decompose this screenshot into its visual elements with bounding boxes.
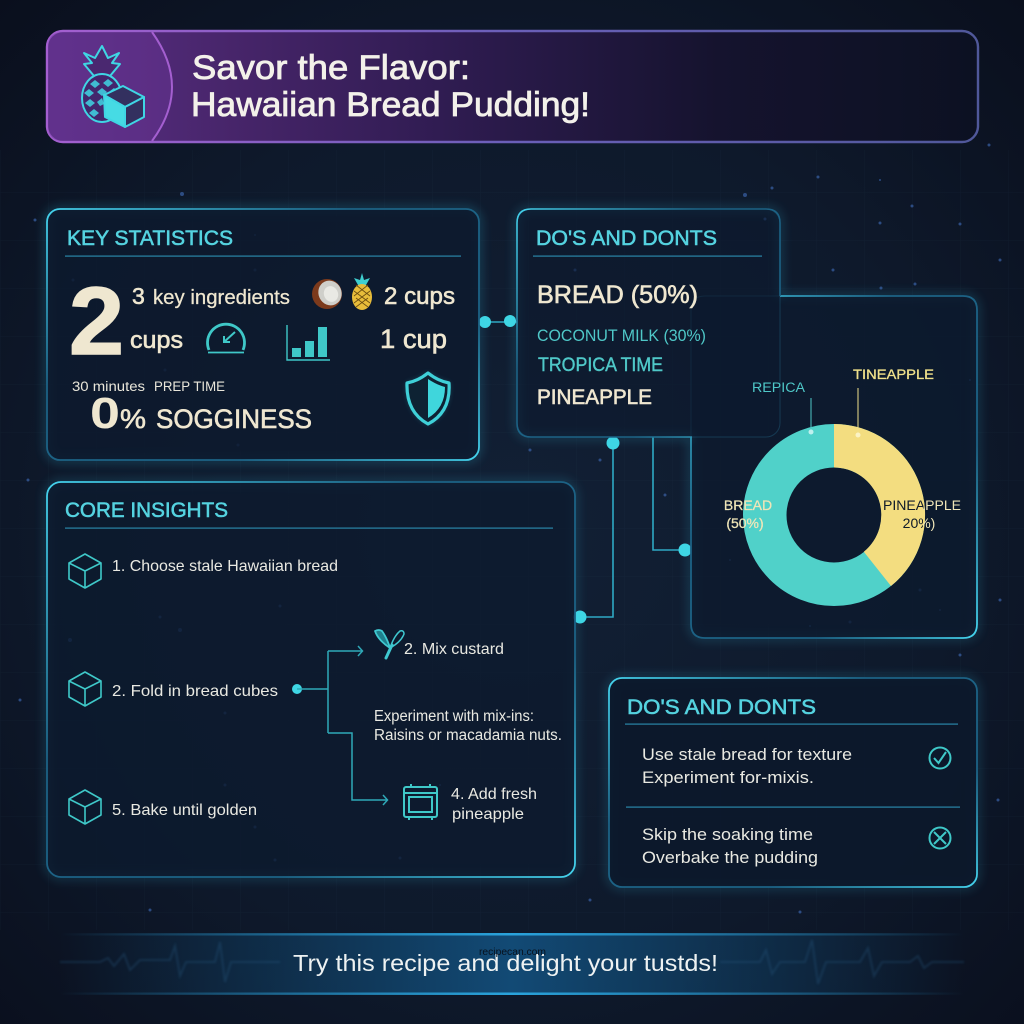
icon: pineapple with bread cube <box>82 46 144 127</box>
footer call to action: Try this recipe and delight your tustds! <box>293 950 718 976</box>
icon: bar chart <box>287 325 330 360</box>
icon: check <box>930 748 950 768</box>
stat: sogginess: SOGGINESS <box>156 404 312 434</box>
step 2 <box>69 672 278 706</box>
panel: chart frame <box>691 296 977 638</box>
stat: 2 cups large: 2 <box>69 268 124 375</box>
panel: do's and donts tips <box>609 678 977 887</box>
chart label: bread: (50%) <box>726 515 764 531</box>
stat: sogginess: % <box>120 404 146 434</box>
step 1 <box>69 554 338 588</box>
step: add fresh pineapple: pineapple <box>452 806 524 823</box>
stat: 2 cups large: cups <box>130 327 183 354</box>
icon: whisk <box>375 630 404 658</box>
dont list <box>642 825 818 867</box>
dont list: Overbake the pudding <box>642 848 818 867</box>
heading: core insights: CORE INSIGHTS <box>65 499 228 522</box>
donut rings <box>765 424 925 586</box>
panel: core insights <box>47 482 575 877</box>
note: mix-ins: Raisins or macadamia nuts. <box>374 727 562 744</box>
icon: gauge <box>208 324 244 352</box>
icon: cross <box>930 828 950 848</box>
panel: key statistics <box>47 209 479 460</box>
step: mix custard: 2. Mix custard <box>404 641 504 658</box>
note: mix-ins <box>374 708 562 744</box>
step 1: 1. Choose stale Hawaiian bread <box>112 558 338 575</box>
title: Savor the Flavor: <box>192 49 470 87</box>
ingredient list <box>537 281 706 409</box>
ingredient list: BREAD (50%) <box>537 281 698 309</box>
stat: key ingredients: key ingredients <box>153 287 290 309</box>
chart label: tineapple <box>853 366 934 438</box>
ingredient list: PINEAPPLE <box>537 386 652 409</box>
stat: 2 cups large <box>69 268 183 375</box>
header banner <box>47 31 978 142</box>
chart label: tineapple: TINEAPPLE <box>853 366 934 382</box>
stat: key ingredients: 3 <box>132 283 145 309</box>
stat: 1 cup: 1 cup <box>380 324 447 354</box>
do list: Use stale bread for texture <box>642 745 852 764</box>
stat: sogginess <box>90 389 312 438</box>
stat: prep time: 30 minutes <box>72 379 145 394</box>
stat: 2 cups: 2 cups <box>384 283 455 310</box>
step 2: 2. Fold in bread cubes <box>112 683 278 700</box>
stat: sogginess: 0 <box>90 389 120 438</box>
note: mix-ins: Experiment with mix-ins: <box>374 708 534 725</box>
ingredient list: TROPICA TIME <box>538 355 663 376</box>
step: add fresh pineapple <box>451 786 537 823</box>
stat: prep time <box>72 379 225 394</box>
donut chart with labels <box>724 366 961 586</box>
step 5 <box>69 790 257 824</box>
title <box>191 49 590 124</box>
stat: prep time: PREP TIME <box>154 379 225 394</box>
ingredient list: COCONUT MILK (30%) <box>537 327 706 345</box>
panel: do's and donts ingredients <box>517 209 780 437</box>
icon: small pineapple <box>352 273 372 310</box>
watermark: recipecan.com <box>479 947 546 958</box>
icon: oven <box>404 784 437 820</box>
heading: do's and donts: DO'S AND DONTS <box>536 227 717 250</box>
step: add fresh pineapple: 4. Add fresh <box>451 786 537 803</box>
connectors <box>479 315 692 624</box>
do list: Experiment for-mixis. <box>642 768 814 787</box>
chart label: repica <box>752 380 814 434</box>
title: Hawaiian Bread Pudding! <box>191 86 590 124</box>
chart label: pineapple: 20%) <box>903 515 935 531</box>
chart label: pineapple: PINEAPPLE <box>883 497 961 513</box>
flow arrows <box>292 646 388 805</box>
chart label: bread: BREAD <box>724 497 772 513</box>
icon: shield <box>407 373 449 424</box>
heading: do's and donts: DO'S AND DONTS <box>627 696 816 719</box>
chart label: bread <box>724 497 772 531</box>
step 5: 5. Bake until golden <box>112 802 257 819</box>
do list <box>642 745 852 787</box>
footer banner <box>60 933 964 995</box>
dont list: Skip the soaking time <box>642 825 813 844</box>
chart label: pineapple <box>883 497 961 531</box>
chart label: repica: REPICA <box>752 380 805 395</box>
icon: coconut <box>312 277 346 309</box>
heading: key statistics: KEY STATISTICS <box>67 227 233 250</box>
